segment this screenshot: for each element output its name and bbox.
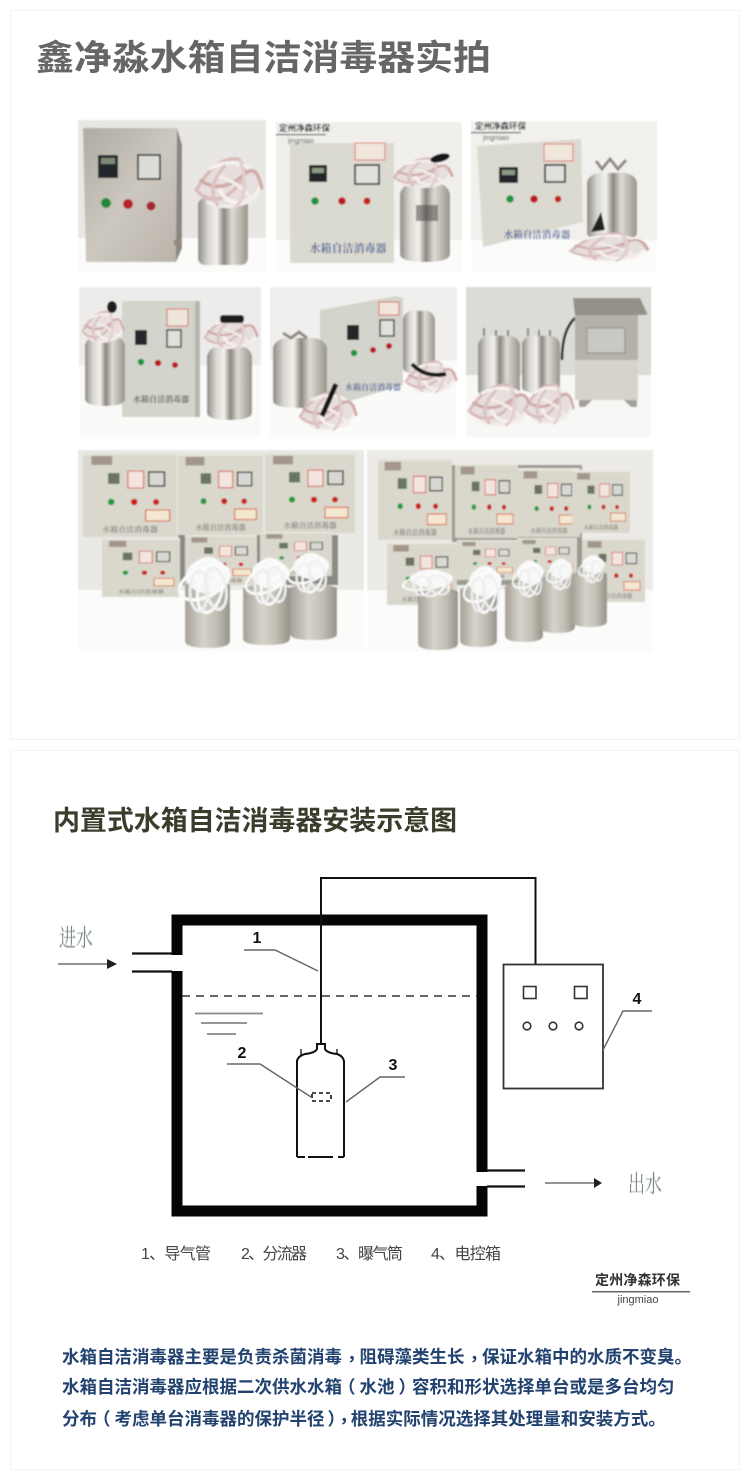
legend: parts list <box>141 1245 501 1263</box>
text block: description: 分布（考虑单台消毒器的保护半径） <box>62 1409 336 1429</box>
outlet pipe <box>487 1170 525 1186</box>
legend: parts list: 1、导气管 <box>141 1245 211 1263</box>
text block: description: ， <box>339 1406 357 1426</box>
photo 2: grey control box with tank: 定州净森环保 <box>279 123 331 133</box>
photo 2: grey control box with tank: jingmiao <box>287 138 314 145</box>
diagram: tank installation schematic <box>58 878 662 1211</box>
heading: installation diagram: 内置式水箱自洁消毒器安装示意图 <box>53 806 457 836</box>
photo 3: grey control box with tank and coil <box>471 121 657 273</box>
outlet label and arrow <box>545 1171 662 1198</box>
leader lines <box>227 950 652 1102</box>
legend: parts list: 3、曝气筒 <box>336 1245 403 1263</box>
photo 4: control box between two tanks <box>79 287 261 437</box>
inlet label and arrow: 进水 <box>59 925 93 952</box>
part numbers: 2 <box>238 1045 247 1062</box>
water tank walls <box>170 920 489 1211</box>
title: 鑫净淼水箱自洁消毒器实拍 <box>36 39 491 78</box>
photo 3: grey control box with tank and coil: 定州净森环保 <box>475 121 527 131</box>
text block: description: 阻碍藻类生长 <box>360 1347 465 1367</box>
photo 3: grey control box with tank and coil: 水箱自洁消毒器 <box>504 229 571 241</box>
text block: description: 根据实际情况选择其处理量和安装方式。 <box>351 1409 666 1429</box>
logo: brand mark <box>592 1272 690 1306</box>
part numbers <box>238 930 642 1074</box>
text block: description: 保证水箱中的水质不变臭。 <box>482 1347 692 1367</box>
panel: product photos <box>10 10 740 740</box>
part numbers: 4 <box>633 991 642 1008</box>
panel: installation diagram <box>10 750 740 1470</box>
photo 5: control box with tank and coils <box>270 287 457 437</box>
text block: description: ， <box>347 1344 364 1364</box>
photo 2: grey control box with tank: 水箱自洁消毒器 <box>310 241 386 255</box>
logo: brand mark: 定州净森环保 <box>595 1272 680 1288</box>
text block: description <box>62 1344 692 1429</box>
legend: parts list: 4、电控箱 <box>431 1245 501 1263</box>
aeration cylinder <box>297 1044 344 1157</box>
legend: parts list: 2、分流器 <box>241 1245 307 1263</box>
control box <box>504 964 603 1088</box>
photo 1: stainless control box with tank <box>78 120 266 273</box>
part numbers: 1 <box>253 930 262 947</box>
photo 6: stainless cabinet with two tanks <box>466 287 651 437</box>
inlet label and arrow <box>58 925 117 969</box>
part numbers: 3 <box>389 1057 398 1074</box>
photo 2: grey control box with tank <box>276 122 462 273</box>
text block: description: 水箱自洁消毒器应根据二次供水水箱（水池）容积和形状选择单台或是多台均匀 <box>62 1377 674 1397</box>
photo 5: control box with tank and coils: 水箱自洁消毒器 <box>345 382 401 392</box>
water level line <box>182 995 477 997</box>
photo 8: rows of control boxes and five tanks <box>367 450 653 652</box>
air tube wiring to control box <box>321 878 536 1043</box>
photo 7: three control boxes and three tanks <box>78 450 364 652</box>
text block: description: 水箱自洁消毒器主要是负责杀菌消毒 <box>62 1347 342 1367</box>
inlet pipe <box>132 954 172 972</box>
outlet label and arrow: 出水 <box>628 1171 662 1198</box>
logo: brand mark: jingmiao <box>617 1294 658 1306</box>
text block: description: ， <box>470 1344 487 1364</box>
photo 3: grey control box with tank and coil: jingmiao <box>482 135 509 142</box>
photo 4: control box between two tanks: 水箱自洁消毒器 <box>133 394 189 404</box>
water surface marks <box>195 1014 263 1034</box>
